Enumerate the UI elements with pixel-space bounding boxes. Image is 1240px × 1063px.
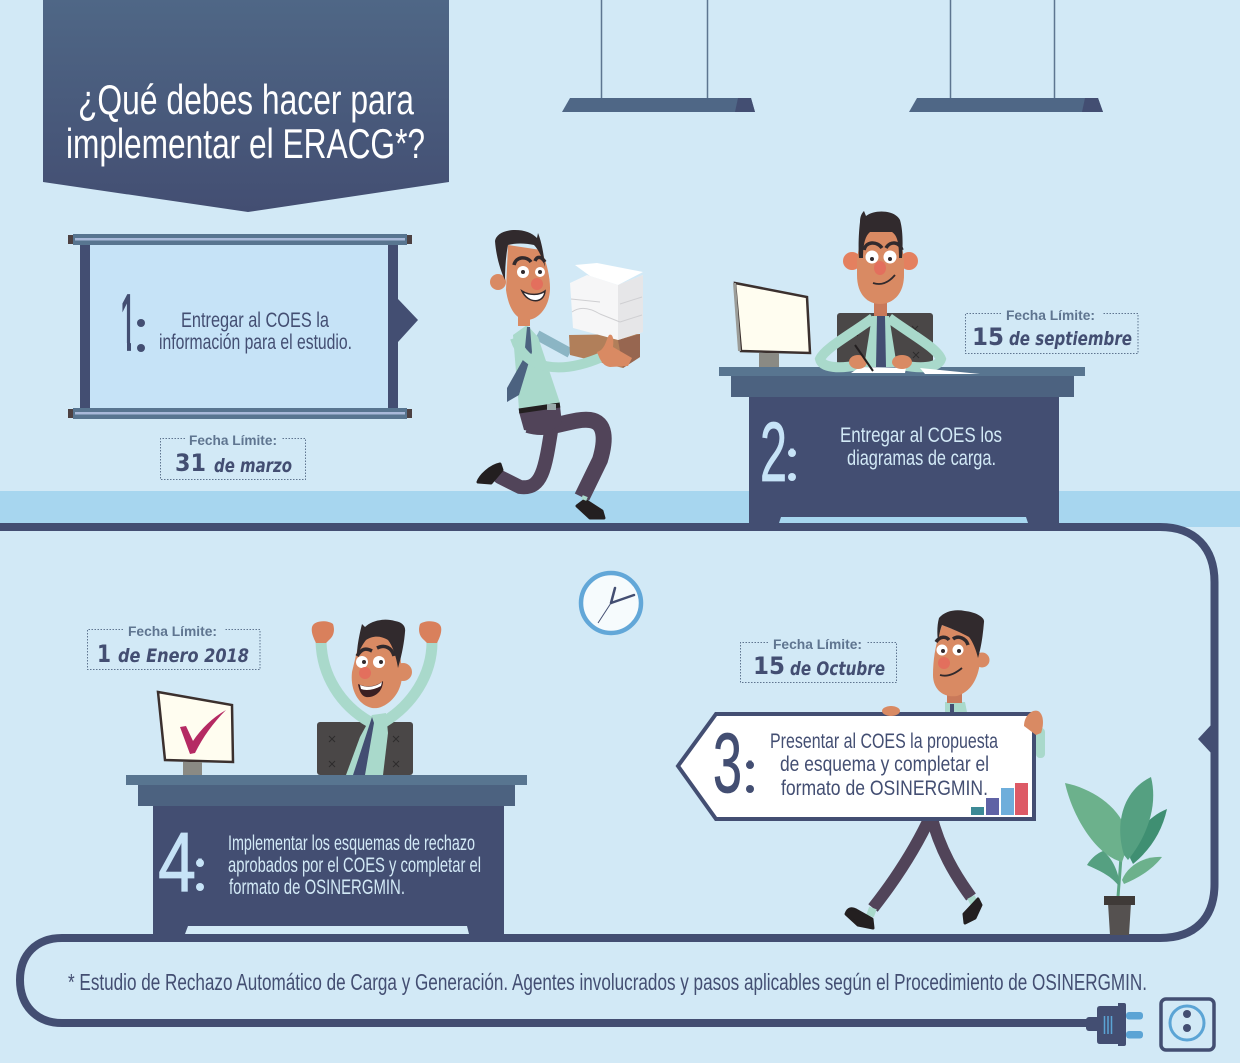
- panel: step 3 sign: :: [745, 738, 755, 805]
- panel: step 2 desk: diagramas de carga.: [847, 447, 996, 470]
- icon: check mark: [180, 710, 226, 754]
- deadline 4: de Enero 2018: [118, 645, 249, 667]
- panel: step 1 projection screen: Entregar al COES la: [181, 309, 329, 332]
- panel: step 4 desk: aprobados por el COES y completar el: [228, 854, 481, 877]
- deadline 3: [740, 636, 896, 682]
- character: man writing at desk: [820, 211, 980, 374]
- panel: step 1 projection screen: información para el estudio.: [159, 331, 352, 354]
- character: man holding sign: [846, 610, 1045, 928]
- title banner: ¿Qué debes hacer para: [78, 76, 414, 123]
- deadline 2: [966, 307, 1138, 354]
- panel: step 4 desk: [126, 692, 527, 936]
- deadline 4: Fecha Límite:: [128, 623, 217, 639]
- deadline 3: de Octubre: [790, 658, 885, 680]
- deadline 2: de septiembre: [1009, 328, 1132, 350]
- title banner: [43, 0, 449, 212]
- floor band: [0, 491, 1240, 527]
- panel: step 3 sign: de esquema y completar el: [780, 753, 989, 776]
- title banner: implementar el ERACG*?: [66, 120, 425, 167]
- deadline 1: de marzo: [214, 455, 292, 477]
- deadline 2: 15: [972, 323, 1004, 351]
- panel: step 1 projection screen: :: [136, 297, 146, 364]
- deadline 1: [160, 432, 306, 480]
- panel: step 1 projection screen: 1: [120, 278, 136, 367]
- panel: step 4 desk: 4: [158, 815, 196, 909]
- panel: step 4 desk: :: [195, 836, 205, 903]
- character: man carrying papers: [478, 230, 643, 518]
- deadline 1: 31: [175, 449, 206, 477]
- panel: step 3 sign: formato de OSINERGMIN.: [781, 777, 988, 800]
- panel: step 3 sign: 3: [713, 716, 742, 810]
- panel: step 1 projection screen: [68, 234, 418, 419]
- icon: small bar chart: [971, 783, 1028, 815]
- cable path: [0, 527, 1214, 1023]
- ceiling lamp left: [562, 0, 755, 112]
- deadline 3: Fecha Límite:: [773, 636, 862, 652]
- panel: step 3 sign: [678, 706, 1043, 819]
- panel: step 2 desk: :: [787, 426, 797, 493]
- plant: [1065, 777, 1167, 935]
- icon: plug: [1086, 1003, 1143, 1046]
- panel: step 3 sign: Presentar al COES la propuesta: [770, 730, 998, 753]
- deadline 4: 1: [97, 640, 111, 668]
- ceiling lamp right: [909, 0, 1103, 112]
- deadline 3: 15: [753, 652, 785, 680]
- panel: step 4 desk: Implementar los esquemas de rechazo: [228, 832, 475, 855]
- icon: wall socket: [1161, 999, 1214, 1050]
- icon: wall clock: [581, 573, 641, 633]
- panel: step 4 desk: formato de OSINERGMIN.: [229, 876, 405, 899]
- deadline 4: [88, 623, 260, 670]
- panel: step 2 desk: Entregar al COES los: [840, 424, 1002, 447]
- arrow on cable: [1198, 725, 1211, 753]
- character: man celebrating: [312, 620, 441, 775]
- deadline 2: Fecha Límite:: [1006, 307, 1095, 323]
- panel: step 2 desk: 2: [760, 405, 787, 499]
- deadline 1: Fecha Límite:: [189, 432, 277, 448]
- panel: step 2 desk: [719, 283, 1085, 523]
